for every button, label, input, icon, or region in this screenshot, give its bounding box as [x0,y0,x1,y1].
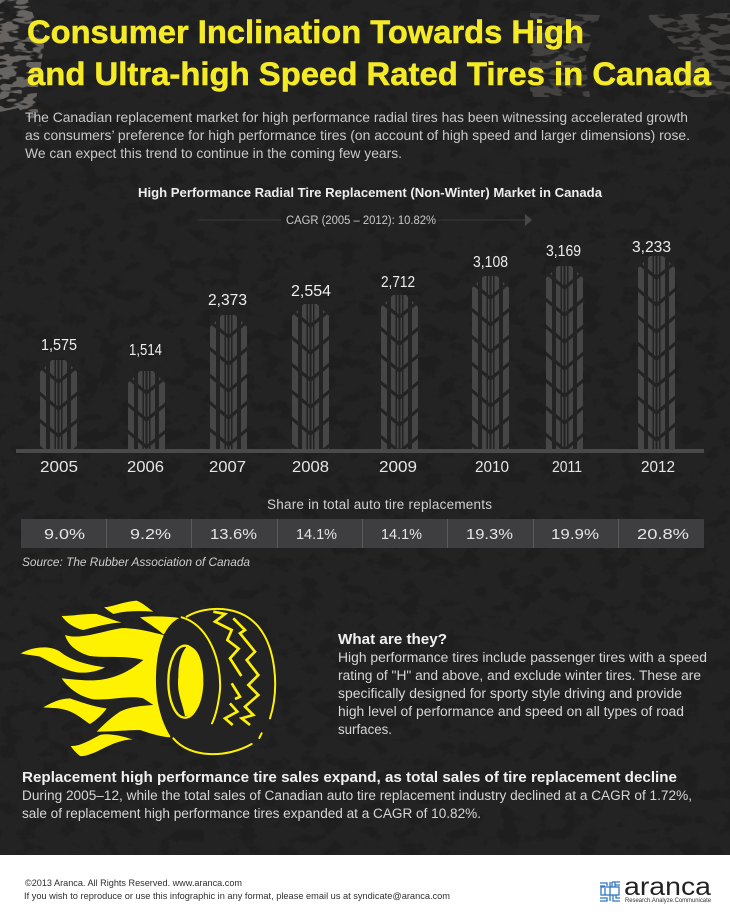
share table: 19.3% [466,527,513,543]
logo tagline: Research.Analyze.Communicate [625,897,711,904]
share table: 20.8% [637,527,689,543]
copyright text [24,878,450,902]
share table: 9.2% [130,527,171,543]
definition text: rating of "H" and above, and exclude winter tires. These are [338,668,701,683]
intro text: We can expect this trend to continue in the coming few years. [25,145,402,161]
title [27,14,711,92]
value labels: 2,373 [208,292,247,309]
source: Source: The Rubber Association of Canada [22,557,250,569]
icon: flaming tire [21,601,275,756]
chart title: High Performance Radial Tire Replacement (Non-Winter) Market in Canada [138,185,603,200]
copyright text: ©2013 Aranca. All Rights Reserved. www.aranca.com [25,878,242,889]
value labels: 1,514 [129,342,162,359]
share heading: Share in total auto tire replacements [267,497,492,512]
year labels: 2012 [641,459,675,476]
sales text: sale of replacement high performance tires expanded at a CAGR of 10.82%. [22,806,481,821]
CAGR annotation: CAGR (2005 – 2012): 10.82% [286,215,436,227]
value labels: 3,108 [473,254,508,271]
share table: 14.1% [381,527,422,543]
year labels: 2008 [292,459,329,476]
share table [21,519,704,548]
sales text [22,788,692,821]
share table: 19.9% [551,527,599,543]
bar 2011 [546,266,583,449]
year labels: 2007 [209,459,246,476]
bar 2005 [40,360,77,449]
intro text: as consumers’ preference for high performance tires (on account of high speed and larger dimensions) rose. [25,127,690,143]
value labels: 1,575 [41,337,77,354]
definition text: high level of performance and speed on all types of road [338,704,684,719]
icon: logo mark [600,882,620,901]
year labels: 2011 [552,459,582,476]
bar 2008 [292,304,329,449]
value labels: 3,169 [546,243,581,260]
title: Consumer Inclination Towards High [27,14,584,50]
share table: 9.0% [44,527,85,543]
CAGR annotation [197,214,532,227]
definition text: specifically designed for sporty style driving and provide [338,686,682,701]
bar 2012 [638,256,675,449]
definition text [338,650,707,737]
bar 2006 [128,371,165,449]
share table: 14.1% [296,527,337,543]
intro text: The Canadian replacement market for high performance radial tires has been witnessing accelerated growth [25,109,688,125]
what are they heading: What are they? [338,632,447,648]
sales panel [22,770,692,821]
sales text: During 2005–12, while the total sales of Canadian auto tire replacement industry declined at a CAGR of 1.72%, [22,788,692,803]
year labels: 2005 [40,459,78,476]
copyright text: If you wish to reproduce or use this infographic in any format, please email us at syndicate@aranca.com [24,891,450,902]
bar 2007 [210,315,247,449]
aranca logo [600,873,711,904]
value labels: 2,554 [291,283,331,300]
bar chart [16,239,704,476]
year labels: 2006 [127,459,164,476]
year labels: 2010 [475,459,509,476]
share table: 13.6% [210,527,257,543]
title: and Ultra-high Speed Rated Tires in Canada [27,56,711,92]
sales heading: Replacement high performance tire sales expand, as total sales of tire replacement decline [22,770,677,786]
value labels: 2,712 [381,274,415,291]
definition text: surfaces. [338,722,392,737]
footer [0,855,730,918]
background texture [0,0,730,126]
bar 2009 [381,295,418,449]
axis [16,449,704,453]
definition text: High performance tires include passenger tires with a speed [338,650,707,665]
value labels: 3,233 [632,239,671,256]
value labels [41,239,671,359]
year labels: 2009 [379,459,417,476]
logo wordmark: aranca [624,873,711,901]
what are they panel [338,632,707,737]
intro text [25,109,690,161]
year labels [40,459,675,476]
bar 2010 [472,276,509,449]
